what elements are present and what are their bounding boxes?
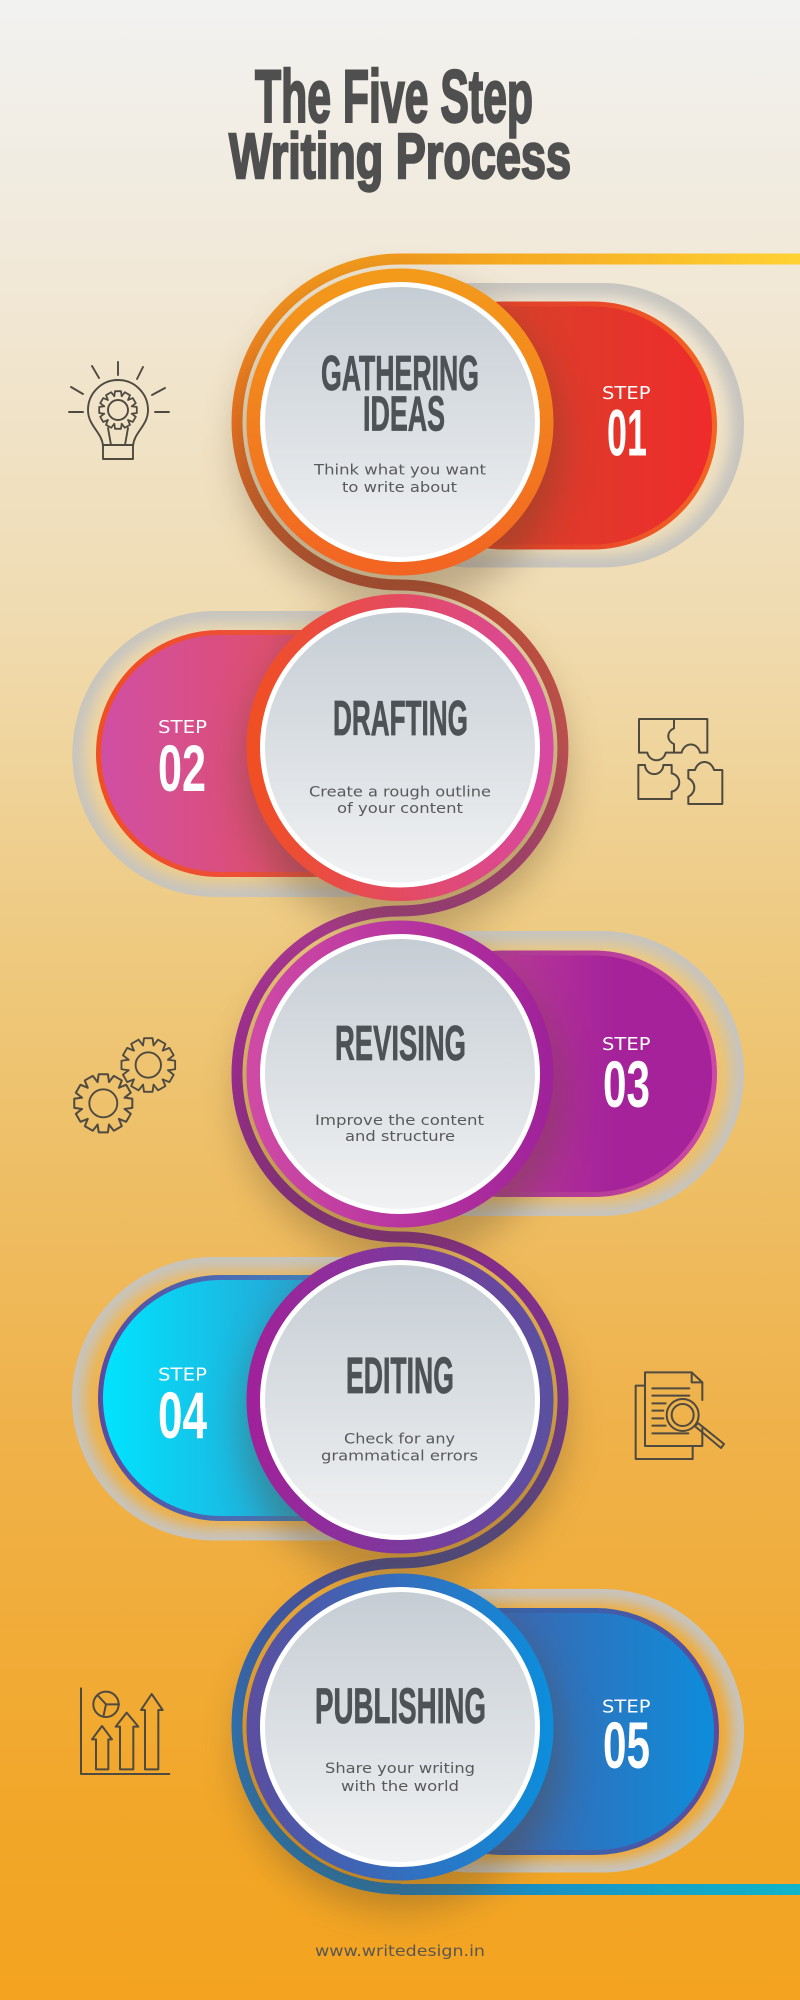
step 2 circle shadow (242, 607, 566, 931)
step 3 description: Improve the content (315, 1113, 484, 1129)
title: Writing Process (229, 120, 571, 192)
step 1 description: Think what you want (313, 462, 486, 478)
icon: two gears (74, 1038, 175, 1132)
step 4 pill (72, 1257, 344, 1540)
panel: step 1 gathering ideas (238, 276, 744, 606)
icon: light bulb with gear (69, 362, 169, 459)
step 1 heading: IDEAS (363, 386, 445, 442)
panel: step 4 editing (72, 1254, 566, 1584)
step 5 description: with the world (341, 1779, 459, 1795)
step 4 label (158, 1366, 207, 1452)
title (229, 55, 571, 192)
step 3 label (602, 1035, 650, 1121)
step 3 description (315, 1113, 484, 1145)
step 3 circle shadow (238, 934, 562, 1258)
step 4 circle (254, 1254, 546, 1546)
step 4 description: grammatical errors (321, 1448, 478, 1464)
step 5 label (602, 1698, 650, 1782)
step 3 label: STEP (602, 1035, 650, 1055)
icon: growth chart with arrows (81, 1688, 169, 1774)
step 1 description (313, 462, 486, 496)
step 4 label: STEP (158, 1366, 207, 1386)
step 2 circle (254, 601, 546, 894)
step 1 label: STEP (602, 384, 650, 404)
step 1 circle (254, 276, 546, 568)
step 5 description (325, 1761, 475, 1795)
step 5 label: STEP (602, 1698, 650, 1718)
step 1 pill (453, 283, 744, 568)
step 1 heading: GATHERING (321, 346, 479, 401)
panel: step 3 revising (238, 928, 744, 1258)
ribbon connecting all five steps (237, 259, 800, 1890)
step 4 circle shadow (242, 1260, 566, 1584)
step 5 heading: PUBLISHING (315, 1677, 486, 1734)
step 1 heading (321, 346, 479, 442)
panel: step 5 publishing (238, 1580, 744, 1911)
step 5 circle shadow (238, 1587, 562, 1911)
step 5 label: 05 (603, 1708, 650, 1782)
step 3 label: 03 (603, 1047, 650, 1121)
title: The Five Step (255, 55, 533, 138)
icon: document with magnifier (636, 1372, 724, 1459)
step 1 description: to write about (342, 480, 457, 496)
step 2 label (158, 718, 207, 805)
step 4 description (321, 1432, 478, 1464)
step 1 label (602, 384, 650, 470)
step 1 label: 01 (607, 396, 647, 470)
step 3 circle (254, 928, 546, 1220)
step 5 description: Share your writing (325, 1761, 475, 1777)
step 5 pill (452, 1589, 744, 1872)
step 3 heading: REVISING (335, 1016, 466, 1071)
step 2 label: STEP (158, 718, 207, 738)
step 2 pill (72, 611, 360, 897)
step 2 description (309, 784, 491, 817)
step 4 label: 04 (158, 1378, 207, 1452)
step 4 heading: EDITING (346, 1347, 454, 1404)
icon: puzzle pieces (638, 719, 722, 804)
step 5 circle (254, 1580, 546, 1874)
step 2 heading: DRAFTING (333, 691, 468, 746)
panel: step 2 drafting (72, 601, 566, 931)
step 4 description: Check for any (344, 1432, 455, 1448)
step 2 description: of your content (337, 801, 463, 817)
step 1 circle shadow (238, 282, 562, 606)
step 3 pill (458, 931, 744, 1216)
footer website: www.writedesign.in (315, 1942, 485, 1960)
step 2 description: Create a rough outline (309, 784, 491, 800)
step 3 description: and structure (345, 1129, 455, 1145)
step 2 label: 02 (158, 731, 206, 805)
